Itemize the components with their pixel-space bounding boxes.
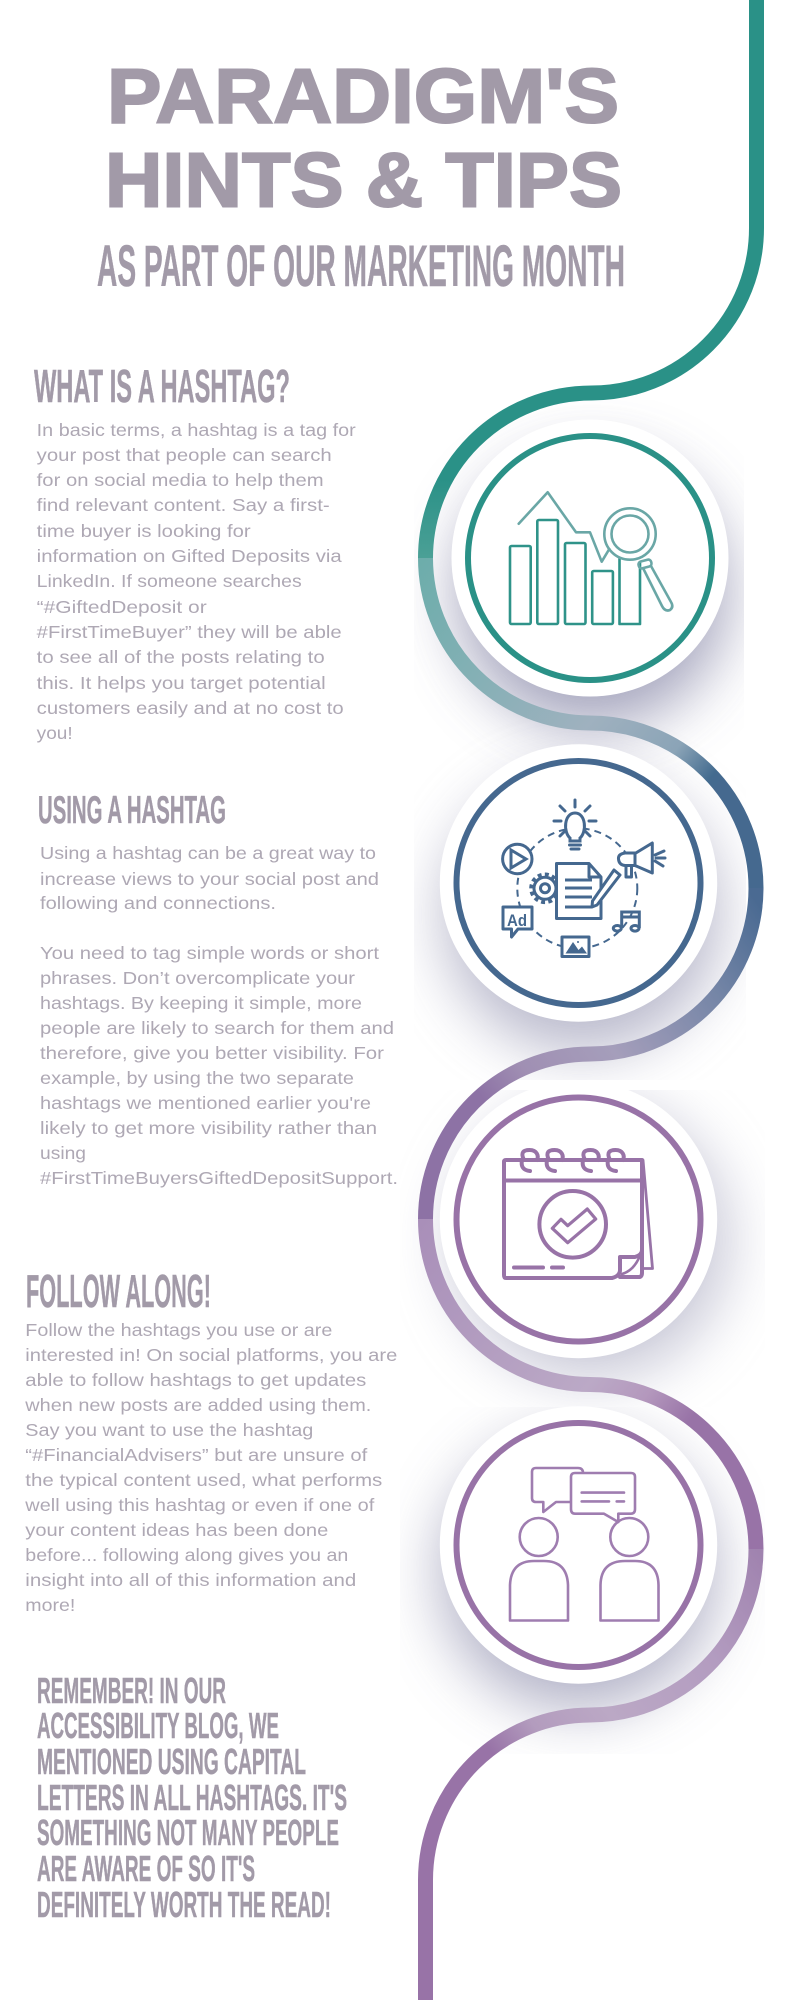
icon: ad bubble [503,907,532,937]
body text: using a hashtag: increase views to your social post and [40,869,379,889]
body text: using a hashtag: phrases. Don’t overcomplicate your [40,968,355,988]
callout: remember [37,1670,347,1925]
icon: light bulb [554,800,596,849]
icon: two people talking [510,1468,658,1620]
body text: what is a hashtag: customers easily and at no cost to [37,698,344,718]
winding timeline path [425,0,756,2000]
circle badge: analytics [452,420,728,696]
body text: using a hashtag: hashtags. By keeping it simple, more [40,993,362,1013]
callout: remember: DEFINITELY WORTH THE READ! [37,1884,331,1925]
title: PARADIGM'S [107,54,619,140]
circle badge: content marketing [440,744,717,1022]
body text: follow along: well using this hashtag or even if one of [24,1495,374,1515]
title: HINTS & TIPS [105,138,622,224]
body text: what is a hashtag: time buyer is looking for [37,521,251,541]
body text: what is a hashtag: #FirstTimeBuyer” they will be able [37,622,342,642]
body text: follow along: insight into all of this information and [25,1570,356,1590]
icon: document [556,864,601,918]
body text: what is a hashtag: LinkedIn. If someone searches [37,571,302,591]
circle badge: calendar [440,1081,717,1358]
body text: follow along: interested in! On social platforms, you are [25,1345,397,1365]
section: what is a hashtag [34,360,356,743]
body text: what is a hashtag: to see all of the posts relating to [37,647,325,667]
title [105,54,622,224]
body text: what is a hashtag: your post that people can search [37,445,332,465]
body text: using a hashtag: likely to get more visibility rather than [40,1118,377,1138]
body text: follow along: more! [25,1595,75,1615]
icon: play button [503,844,532,874]
body text: using a hashtag: people are likely to search for them and [40,1018,394,1038]
body text: using a hashtag: Using a hashtag can be a great way to [40,843,376,863]
body text: using a hashtag: hashtags we mentioned earlier you're [40,1093,371,1113]
drop shadows behind circles [440,456,728,1710]
icon: ad bubble: Ad [507,911,527,930]
body text: what is a hashtag: information on Gifted Deposits via [37,546,342,566]
body text: what is a hashtag [37,420,356,743]
body text: follow along: the typical content used, what performs [25,1470,383,1490]
body text: what is a hashtag: for on social media to help them [37,470,324,490]
circle badge: conversation [440,1406,717,1684]
body text: what is a hashtag: find relevant content. Say a first- [37,495,330,515]
body text: using a hashtag [40,843,398,1188]
body text: what is a hashtag: this. It helps you target potential [37,673,326,693]
body text: what is a hashtag: “#GiftedDeposit or [37,597,207,617]
callout: remember: LETTERS IN ALL HASHTAGS. IT'S [37,1777,347,1818]
body text: what is a hashtag: In basic terms, a hashtag is a tag for [37,420,356,440]
icon: bar chart with magnifier [510,492,672,624]
body text: follow along: Follow the hashtags you use or are [25,1320,332,1340]
body text: using a hashtag: #FirstTimeBuyersGiftedDepositSupport. [40,1168,398,1188]
icon: calendar with check mark [504,1150,652,1278]
callout: remember: ACCESSIBILITY BLOG, WE [37,1705,279,1746]
icon: pencil [592,870,620,907]
body text: using a hashtag: therefore, give you better visibility. For [40,1043,384,1063]
icon: picture [562,937,589,956]
body text: follow along: your content ideas has been done [25,1520,328,1540]
section: using a hashtag [38,789,398,1188]
body text: using a hashtag: You need to tag simple words or short [40,943,379,963]
icon: music notes [613,912,639,931]
callout: remember: REMEMBER! IN OUR [37,1670,226,1711]
body text: using a hashtag: following and connections. [40,893,276,913]
callout: remember: SOMETHING NOT MANY PEOPLE [37,1812,339,1853]
callout: remember: MENTIONED USING CAPITAL [37,1741,306,1782]
body text: follow along: Say you want to use the hashtag [25,1420,313,1440]
body text: follow along: when new posts are added using them. [24,1395,371,1415]
body text: using a hashtag: using [40,1143,86,1163]
callout: remember: ARE AWARE OF SO IT'S [37,1848,255,1889]
heading: using a hashtag: USING A HASHTAG [38,789,226,832]
icon: megaphone [618,843,665,877]
section: follow along: FOLLOW ALONG! [26,1265,211,1317]
icon: content marketing cycle [503,800,665,956]
body text: follow along [24,1320,397,1615]
body text: using a hashtag: example, by using the two separate [40,1068,354,1088]
body text: what is a hashtag: you! [37,723,73,743]
icon: gear [531,874,559,902]
section: follow along [24,1265,397,1615]
body text: follow along: able to follow hashtags to get updates [25,1370,367,1390]
heading: what is a hashtag: WHAT IS A HASHTAG? [34,360,290,412]
body text: follow along: before... following along gives you an [25,1545,348,1565]
body text: follow along: “#FinancialAdvisers” but are unsure of [25,1445,367,1465]
